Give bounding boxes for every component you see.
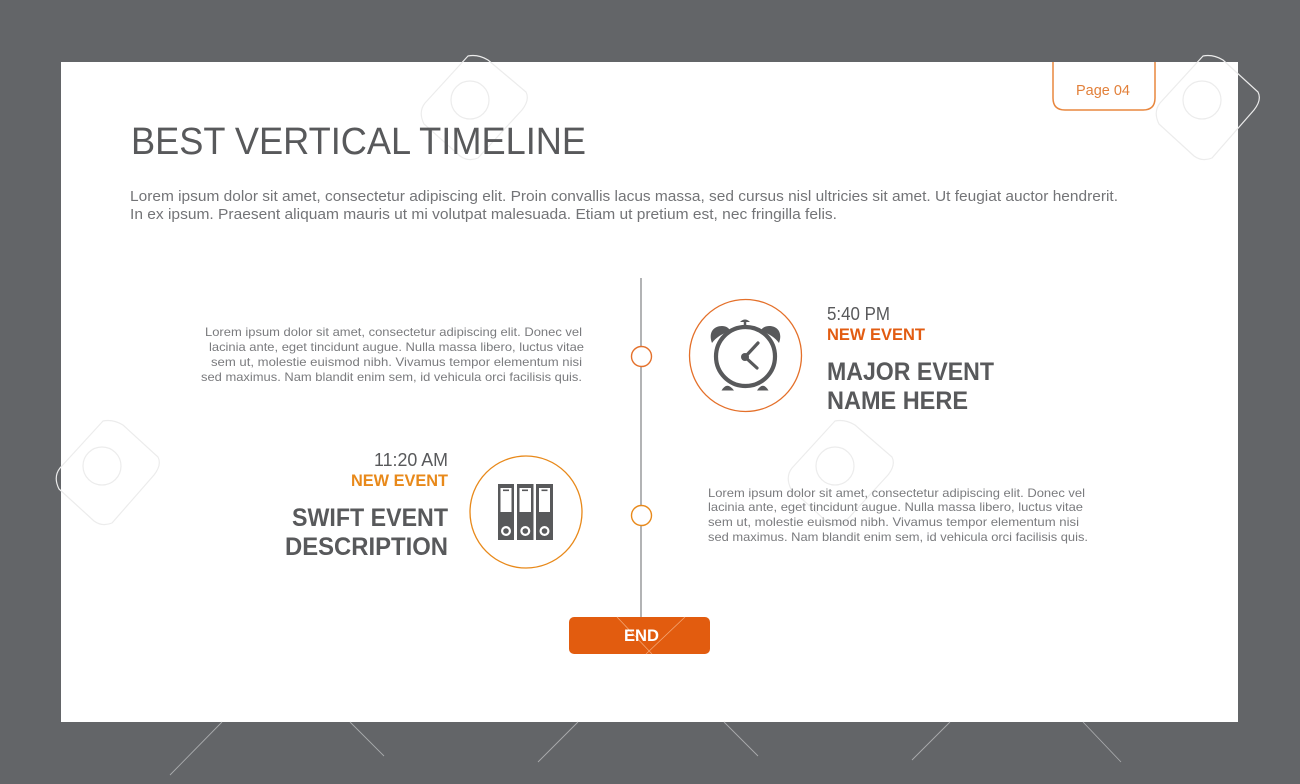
intro text <box>130 188 1118 223</box>
panel: white slide <box>56 56 1259 722</box>
second event description <box>708 486 1088 544</box>
first event description: lacinia ante, eget tincidunt augue. Nulla massa libero, luctus vitae <box>209 340 584 354</box>
timeline node: second event <box>632 506 652 526</box>
first event label <box>827 304 994 415</box>
timeline axis <box>640 278 642 618</box>
second event description: Lorem ipsum dolor sit amet, consectetur adipiscing elit. Donec vel <box>708 486 1085 500</box>
page tab <box>1053 62 1155 110</box>
first event description <box>201 325 584 384</box>
first event label: NEW EVENT <box>827 325 926 344</box>
second event label: NEW EVENT <box>351 471 449 490</box>
second event description: lacinia ante, eget tincidunt augue. Nulla massa libero, luctus vitae <box>708 500 1083 514</box>
second event label: DESCRIPTION <box>285 533 448 561</box>
icon: alarm clock <box>690 300 802 412</box>
intro text: In ex ipsum. Praesent aliquam mauris ut mi volutpat malesuada. Etiam ut pretium est, nec fringilla felis. <box>130 206 837 223</box>
first event description: sed maximus. Nam blandit enim sem, id vehicula orci facilisis quis. <box>201 370 582 384</box>
first event description: Lorem ipsum dolor sit amet, consectetur adipiscing elit. Donec vel <box>205 325 582 339</box>
second event label <box>285 450 449 561</box>
first event label: NAME HERE <box>827 387 968 415</box>
second event label: SWIFT EVENT <box>292 504 448 532</box>
intro text: Lorem ipsum dolor sit amet, consectetur adipiscing elit. Proin convallis lacus massa, sed cursus nisl ultricies sit amet. Ut feugiat auctor hendrerit. <box>130 188 1118 205</box>
first event description: sem ut, molestie euismod nibh. Vivamus tempor elementum nisi <box>211 355 582 369</box>
first event label: MAJOR EVENT <box>827 358 994 386</box>
timeline node: first event <box>632 346 652 366</box>
icon: binders <box>470 456 582 568</box>
end button <box>569 617 710 654</box>
title: BEST VERTICAL TIMELINE <box>131 121 586 163</box>
first event label: 5:40 PM <box>827 304 890 324</box>
second event label: 11:20 AM <box>374 450 448 470</box>
page tab: Page 04 <box>1076 82 1130 99</box>
second event description: sem ut, molestie euismod nibh. Vivamus tempor elementum nisi <box>708 515 1079 529</box>
second event description: sed maximus. Nam blandit enim sem, id vehicula orci facilisis quis. <box>708 530 1088 544</box>
end button: END <box>624 626 659 645</box>
